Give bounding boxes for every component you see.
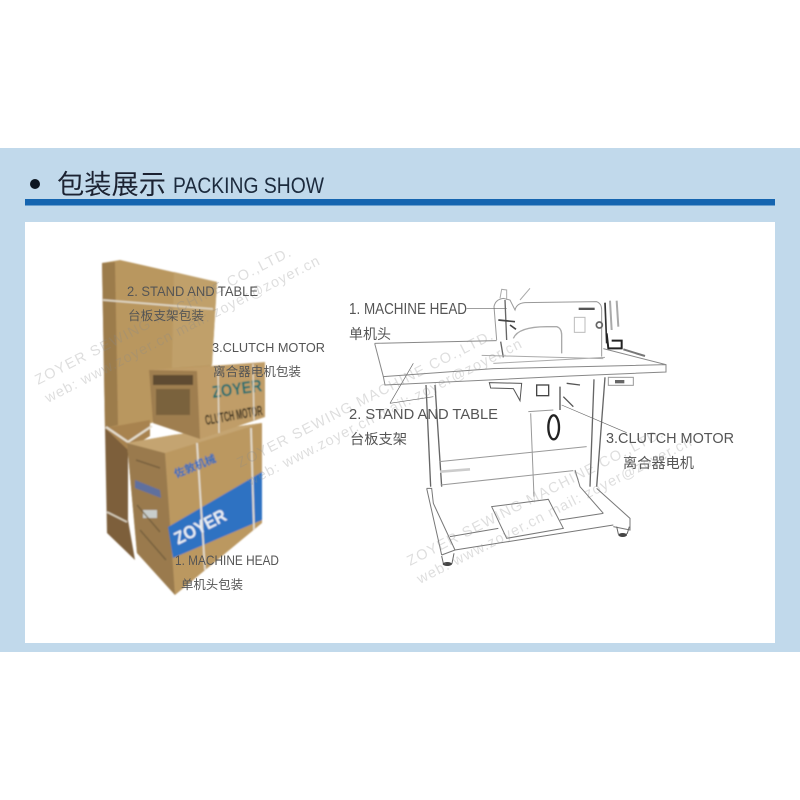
label: carton stand and table: 2. STAND AND TABLE [127, 284, 258, 299]
label: machine head: 1. MACHINE HEAD [349, 301, 467, 318]
machine head [494, 288, 645, 357]
section heading [30, 170, 325, 200]
feet [442, 527, 629, 566]
label: carton clutch motor [212, 340, 325, 379]
carton: machine head: 佐敦机械 [172, 451, 218, 481]
label: stand and table: 台板支架 [350, 432, 407, 448]
label: carton machine head: 1. MACHINE HEAD [175, 552, 279, 568]
drawing: sewing machine on table [375, 288, 666, 566]
label: stand and table: 2. STAND AND TABLE [349, 406, 498, 423]
watermark: center: web: www.zoyer.cn mail: zoyer@zoyer.cn [244, 336, 524, 490]
photo: stacked cartons [102, 260, 265, 595]
carton: clutch motor: ZOYER [211, 376, 263, 402]
watermark: left: ZOYER SEWING MACHINE CO.,LTD. [33, 245, 294, 389]
label: carton stand and table [127, 284, 258, 323]
section heading: PACKING SHOW [173, 173, 325, 198]
watermark: right: ZOYER SEWING MACHINE CO.,LTD. [405, 426, 666, 570]
label: clutch motor: 3.CLUTCH MOTOR [606, 431, 734, 447]
carton: clutch motor: CLUTCH MOTOR [204, 402, 264, 428]
label: clutch motor [606, 431, 734, 472]
watermark: center: ZOYER SEWING MACHINE CO.,LTD. [235, 328, 496, 472]
carton: machine head: ZOYER [171, 505, 230, 549]
carton: clutch motor [149, 362, 265, 439]
section heading: 包装展示 [57, 170, 166, 200]
panel: white content [25, 222, 775, 643]
blue background band [0, 148, 800, 652]
label: carton machine head: 单机头包装 [181, 578, 243, 592]
leader lines [390, 308, 627, 433]
stand frame [426, 377, 605, 497]
label: clutch motor: 离合器电机 [623, 455, 694, 472]
watermark: left: web: www.zoyer.cn mail: zoyer@zoyer.cn [42, 253, 322, 407]
label: carton clutch motor: 离合器电机包装 [213, 364, 301, 379]
heading rule [25, 199, 775, 206]
carton: machine head [127, 423, 262, 595]
label: carton stand and table: 台板支架包装 [128, 309, 204, 323]
label: machine head [349, 301, 467, 342]
label: machine head: 单机头 [349, 326, 391, 342]
clutch motor unit [489, 377, 633, 439]
table top [375, 341, 666, 385]
pedal and base [427, 470, 630, 555]
carton: stand and table [102, 260, 217, 560]
label: carton clutch motor: 3.CLUTCH MOTOR [212, 340, 325, 355]
label: stand and table [349, 406, 498, 448]
label: carton machine head [175, 552, 279, 592]
watermark: right: web: www.zoyer.cn mail: zoyer@zoyer.cn [414, 434, 694, 588]
